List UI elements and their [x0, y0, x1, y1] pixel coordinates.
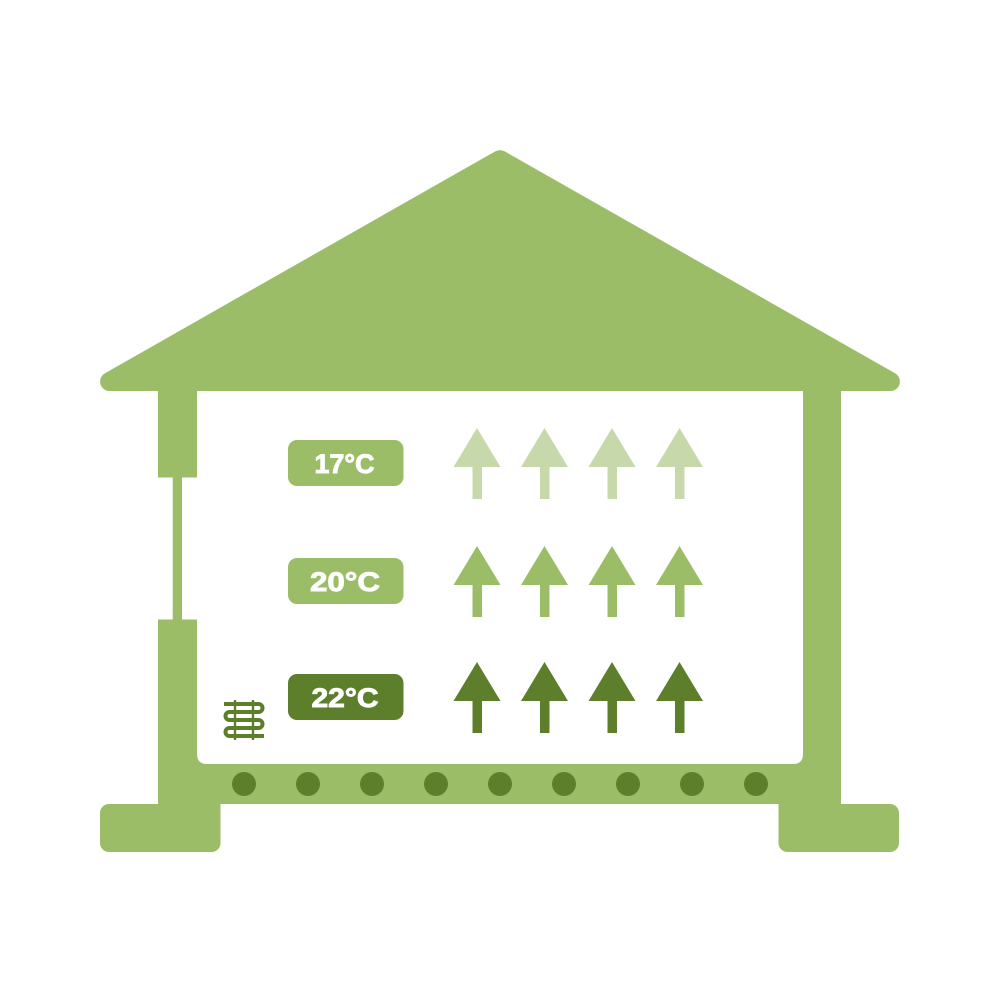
left wall upper [158, 390, 197, 478]
arrows row: 22°C heat flow [454, 662, 703, 733]
arrows row: 20°C heat flow [454, 546, 703, 617]
underfloor heating pipes [232, 772, 768, 796]
temperature badge: 22°C: 22°C [312, 683, 378, 713]
window mullion [173, 477, 182, 620]
house structure [100, 150, 900, 852]
roof [100, 150, 900, 391]
left foundation [100, 804, 220, 852]
temperature badge: 20°C [288, 558, 404, 604]
left wall lower, floor slab and right wall [158, 390, 841, 804]
temperature badge: 22°C [288, 674, 404, 720]
icon: radiator coil [224, 700, 264, 740]
right foundation [778, 804, 899, 852]
arrows row: 17°C heat flow [454, 428, 703, 499]
temperature badge: 20°C: 20°C [310, 567, 380, 597]
temperature badge: 17°C [288, 440, 404, 486]
temperature badge: 17°C: 17°C [314, 449, 374, 479]
